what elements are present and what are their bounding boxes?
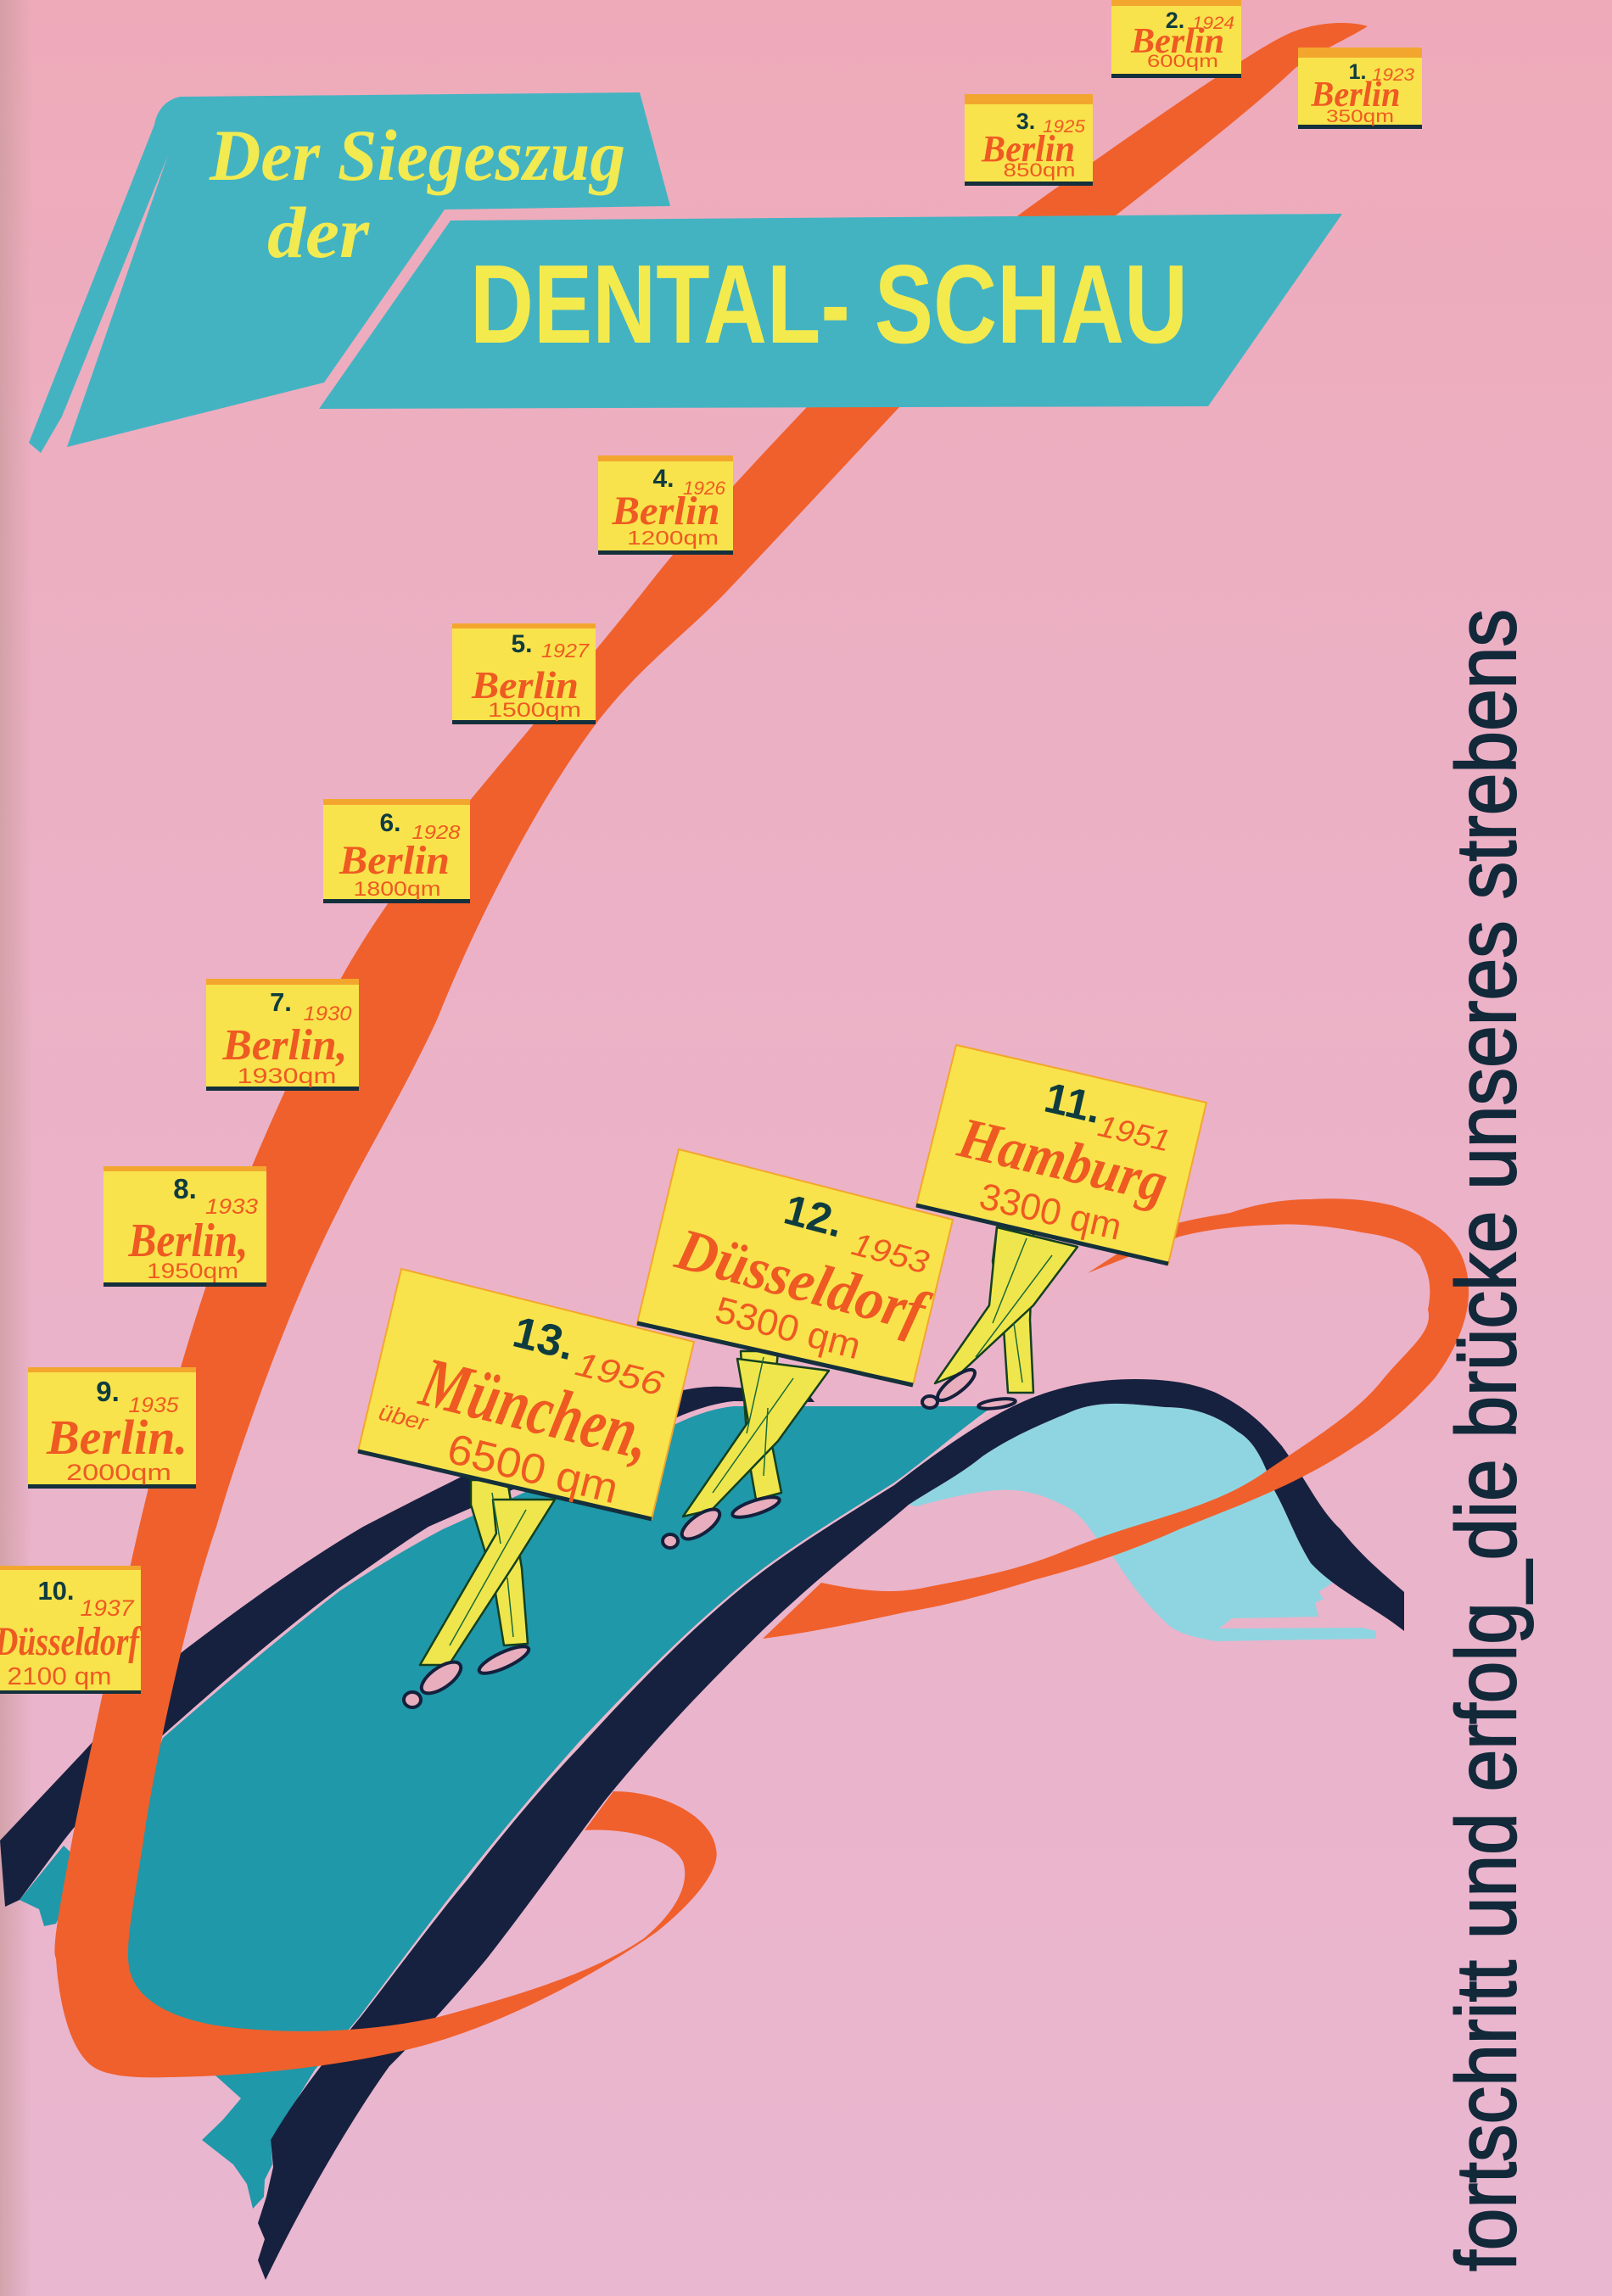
sign 7: 1930 Berlin 1930 qm [206,979,359,1091]
sign 7: 1930 Berlin 1930 qm: Berlin, [222,1021,348,1070]
sign 8: 1933 Berlin 1950 qm: Berlin, [128,1215,248,1267]
title main text: DENTAL- SCHAU [470,242,1188,366]
sign 2: 1924 Berlin 600 qm: 2. [1166,8,1184,33]
sign 13: 1956 München über 6500 qm: 6500 qm [443,1425,623,1512]
sign 3: 1925 Berlin 850 qm: 850qm [1003,159,1076,181]
sign 10: 1937 Düsseldorf 2100 qm: 10. [37,1576,75,1606]
sign 13: 1956 München über 6500 qm [358,1269,694,1519]
sign 2: 1924 Berlin 600 qm: 1924 [1192,14,1234,33]
bridge: pink edge of road [276,1405,999,2137]
sign 10: 1937 Düsseldorf 2100 qm: 2100 qm [7,1663,112,1690]
bridge: lower dark band [258,1379,1404,2280]
sign 4: 1926 Berlin 1200 qm: Berlin [611,489,719,533]
orange ribbon: main sweep [54,23,1368,2077]
title banner: Dental-Schau [319,214,1342,409]
sign 10: 1937 Düsseldorf 2100 qm: Düsseldorf [0,1619,142,1664]
sign 11: 1951 Hamburg 3300 qm: 3300 qm [976,1176,1126,1249]
sign 2: 1924 Berlin 600 qm: Berlin [1130,22,1224,61]
sign 5: 1927 Berlin 1500 qm: 1500qm [488,699,581,722]
walker 11: legs [922,1227,1077,1411]
sign 5: 1927 Berlin 1500 qm: 1927 [541,640,590,662]
sign 3: 1925 Berlin 850 qm: Berlin [981,128,1075,170]
sign 11: 1951 Hamburg 3300 qm: Hamburg [952,1104,1174,1215]
sign 9: 1935 Berlin 2000 qm: Berlin. [46,1410,188,1465]
sign 5: 1927 Berlin 1500 qm: 5. [511,630,533,658]
sign 3: 1925 Berlin 850 qm: 3. [1016,109,1035,134]
sign 13: 1956 München über 6500 qm: 1956 [572,1345,668,1404]
sign 8: 1933 Berlin 1950 qm [104,1166,266,1287]
sign 6: 1928 Berlin 1800 qm [323,799,470,903]
walker 13: legs [404,1480,555,1707]
sign 5: 1927 Berlin 1500 qm: Berlin [471,663,579,707]
bridge: teal road surface [110,1406,997,2209]
sign 10: 1937 Düsseldorf 2100 qm: 1937 [80,1595,135,1621]
sign 12: 1953 Düsseldorf 5300 qm [637,1149,953,1385]
sign 4: 1926 Berlin 1200 qm [598,455,733,555]
sign 12: 1953 Düsseldorf 5300 qm: 12. [780,1186,848,1247]
sign 4: 1926 Berlin 1200 qm: 1200qm [627,527,719,549]
sign 7: 1930 Berlin 1930 qm: 1930 [304,1003,352,1025]
bridge: pale blue underside [909,1404,1376,1641]
sign 2: 1924 Berlin 600 qm: 600qm [1147,52,1218,71]
sign 9: 1935 Berlin 2000 qm: 9. [96,1376,120,1407]
sign 5: 1927 Berlin 1500 qm [452,623,596,724]
sign 7: 1930 Berlin 1930 qm: 7. [270,987,292,1017]
bridge: teal fragment left [20,1846,85,1926]
sign 4: 1926 Berlin 1200 qm: 4. [652,465,674,493]
sign 11: 1951 Hamburg 3300 qm: 11. [1040,1074,1106,1132]
sign 9: 1935 Berlin 2000 qm: 1935 [129,1394,179,1417]
sign 6: 1928 Berlin 1800 qm: Berlin [339,838,450,883]
sign 6: 1928 Berlin 1800 qm: 1800qm [353,878,441,901]
sign 8: 1933 Berlin 1950 qm: 1933 [205,1195,258,1219]
sign 1: 1923 Berlin 350 qm: 350qm [1326,107,1394,126]
sign 13: 1956 München über 6500 qm: München, [411,1343,658,1476]
sign 10: 1937 Düsseldorf 2100 qm [0,1566,142,1694]
walker 12: legs [663,1351,829,1548]
sign 7: 1930 Berlin 1930 qm: 1930qm [238,1064,336,1088]
sign 13: 1956 München über 6500 qm: 13. [508,1308,579,1370]
sign 9: 1935 Berlin 2000 qm [28,1367,196,1489]
sign 6: 1928 Berlin 1800 qm: 6. [379,809,401,837]
sign 6: 1928 Berlin 1800 qm: 1928 [412,821,461,843]
sign 12: 1953 Düsseldorf 5300 qm: Düsseldorf [669,1216,938,1347]
sign 8: 1933 Berlin 1950 qm: 8. [173,1173,197,1204]
sign 11: 1951 Hamburg 3300 qm [916,1045,1206,1264]
bridge: upper dark band [0,1387,814,1907]
sign 1: 1923 Berlin 350 qm: Berlin [1311,75,1400,115]
sign 1: 1923 Berlin 350 qm: 1. [1349,60,1366,84]
sign 4: 1926 Berlin 1200 qm: 1926 [683,478,726,499]
title script line: Der Siegeszug [209,115,625,196]
sign 12: 1953 Düsseldorf 5300 qm: 5300 qm [711,1289,865,1367]
sign 3: 1925 Berlin 850 qm: 1925 [1043,117,1085,137]
sign 9: 1935 Berlin 2000 qm: 2000qm [66,1460,171,1485]
vertical slogan: fortschritt und erfolg_die brücke unseres strebens [1439,609,1534,2271]
sign 8: 1933 Berlin 1950 qm: 1950qm [147,1260,238,1283]
title word: der: der [267,192,371,273]
sign 11: 1951 Hamburg 3300 qm: 1951 [1094,1108,1173,1158]
sign 12: 1953 Düsseldorf 5300 qm: 1953 [848,1226,932,1282]
orange ribbon: right swirl [763,1198,1469,1639]
sign 3: 1925 Berlin 850 qm [965,94,1093,186]
sign 1: 1923 Berlin 350 qm: 1923 [1372,65,1414,85]
sign 13: 1956 München über 6500 qm: über [376,1399,431,1436]
sign 1: 1923 Berlin 350 qm [1298,47,1422,129]
title flag: Der Siegeszug der [29,92,670,453]
sign 2: 1924 Berlin 600 qm [1111,0,1241,78]
